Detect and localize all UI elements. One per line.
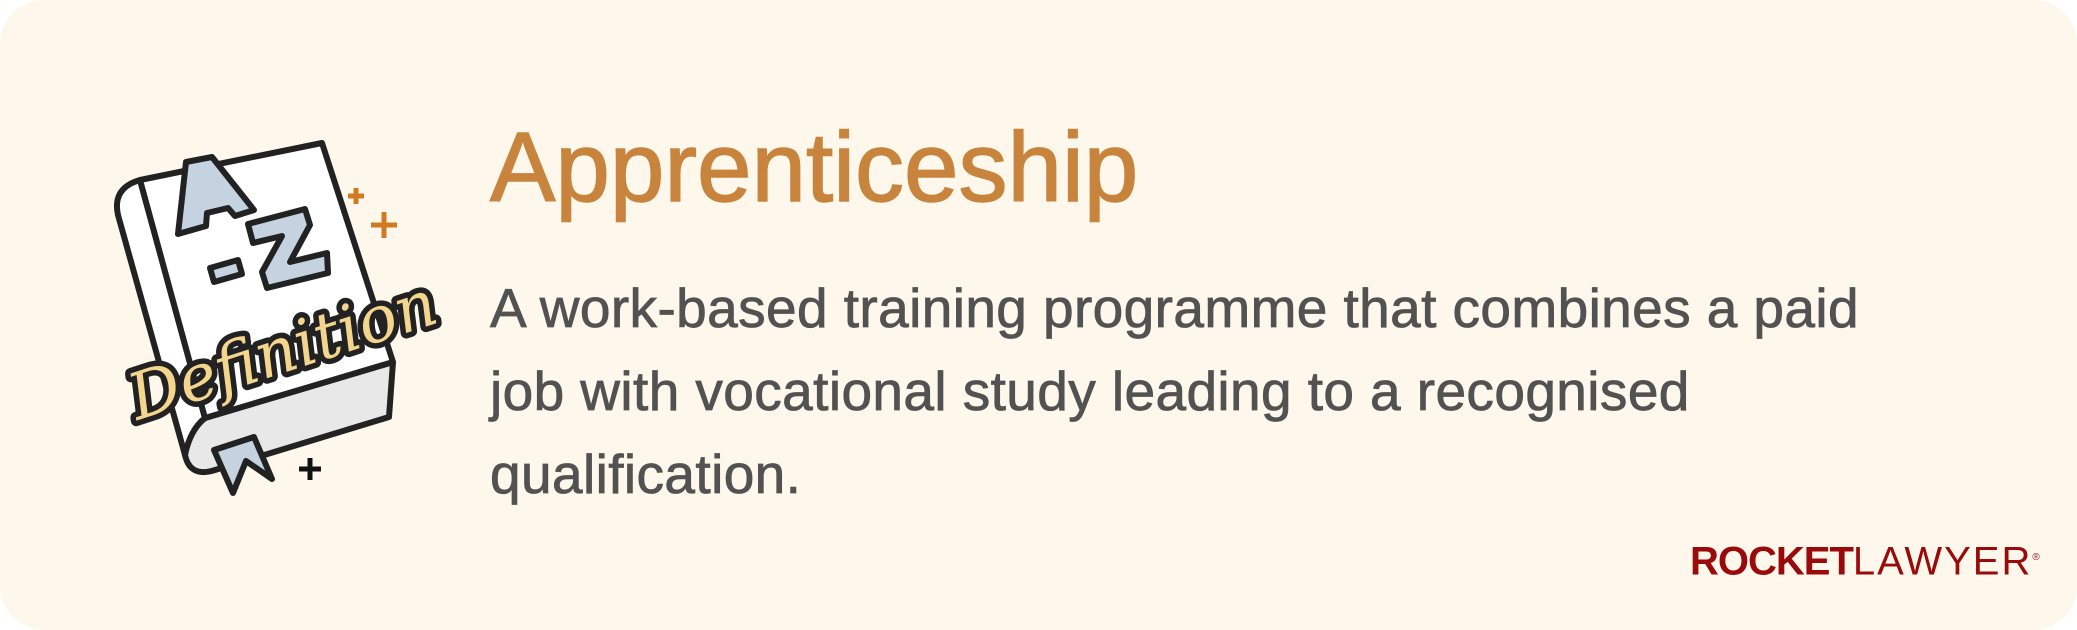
definition text: job with vocational study leading to a recognised — [490, 360, 1690, 422]
icon: A-Z definition book: Definition — [118, 266, 446, 436]
icon: A-Z definition book — [114, 140, 446, 496]
definition text: A work-based training programme that combines a paid — [490, 277, 1859, 339]
logo: Rocket Lawyer: ROCKETLAWYER® — [1690, 539, 2040, 583]
definition text — [488, 277, 1859, 505]
definition text: qualification. — [490, 443, 801, 505]
title: Apprenticeship — [490, 112, 1138, 222]
